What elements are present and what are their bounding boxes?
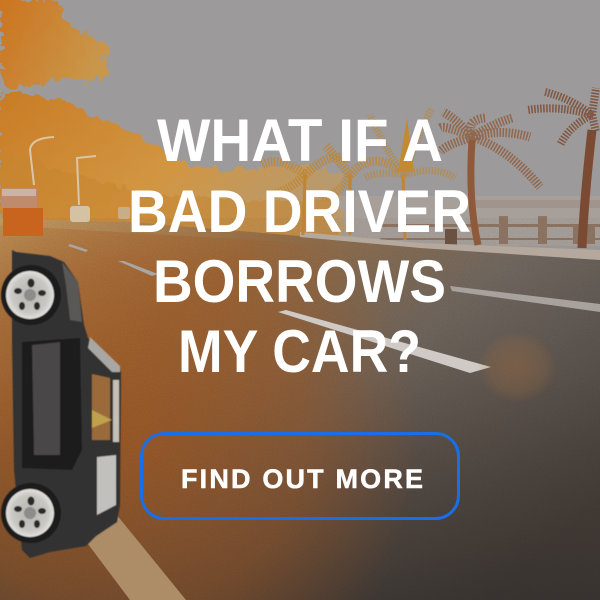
- button: find out more: [142, 434, 458, 518]
- promenade railing: [380, 216, 600, 245]
- rear pillar highlight: [62, 262, 82, 322]
- side door shade: [22, 338, 82, 470]
- car body: [12, 250, 121, 558]
- palm tree middle: [440, 112, 540, 245]
- headline: BAD DRIVER: [128, 178, 471, 245]
- wheel rear: [1, 265, 61, 325]
- rear window glass: [97, 455, 116, 515]
- button: find out more: FIND OUT MORE: [181, 464, 423, 494]
- hillside with sunlit trees: [0, 95, 345, 240]
- headline: [128, 107, 471, 385]
- vehicles in the distance: [1, 188, 130, 236]
- road surface: [0, 218, 600, 600]
- pavement edge: [300, 232, 600, 260]
- lane markings: [68, 244, 600, 600]
- window frame bar: [88, 337, 120, 372]
- wheel front: [1, 483, 61, 543]
- street lamps: [30, 137, 96, 205]
- headline: BORROWS: [153, 248, 446, 315]
- palm tree right: [527, 88, 596, 248]
- headline: MY CAR?: [178, 318, 421, 385]
- lens flare: [477, 331, 557, 403]
- side window with road showing through: [92, 374, 110, 440]
- tree canopy top-left: [0, 0, 112, 92]
- palm trees left group: [262, 108, 455, 240]
- headline: WHAT IF A: [157, 107, 443, 174]
- car: black SUV rotated on its side: [1, 250, 121, 558]
- sea and far shore: [300, 196, 600, 246]
